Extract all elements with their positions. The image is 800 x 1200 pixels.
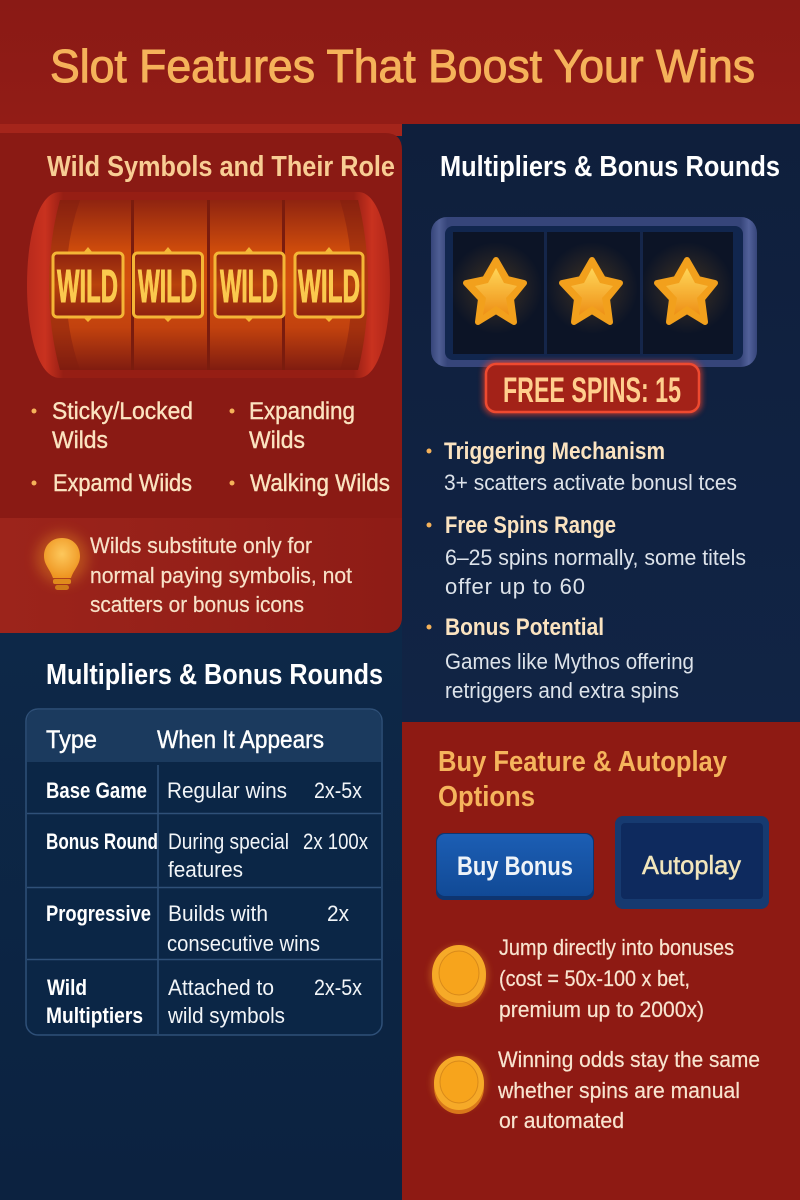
- button: buy bonus: Buy Bonus: [457, 851, 573, 881]
- panel: bottom-left navy background: [0, 620, 402, 1200]
- item: free spins range: [426, 512, 746, 599]
- row: progressive: 2x: [327, 901, 349, 926]
- icon: wild frame 4: [295, 247, 363, 322]
- item: bonus potential: [426, 614, 694, 703]
- text: buy feature note: (cost = 50x-100 x bet,: [499, 966, 690, 991]
- text: buy feature note: [499, 935, 734, 1022]
- row: wild multipliers: 2x-5x: [314, 975, 362, 1000]
- badge: free spins: [483, 361, 702, 415]
- text: wild tip: [90, 533, 353, 617]
- text: autoplay note: whether spins are manual: [497, 1078, 740, 1103]
- heading: buy feature and autoplay: Options: [438, 781, 535, 813]
- text: wild tip: scatters or bonus icons: [90, 592, 304, 617]
- list: wild types: Expanding: [249, 398, 355, 425]
- item: free spins range: 6–25 spins normally, some titels: [445, 545, 746, 570]
- button: autoplay: [615, 816, 769, 909]
- row: bonus round: features: [168, 857, 243, 882]
- icon: wild frame 1: [53, 247, 123, 322]
- row: wild multipliers: [46, 975, 362, 1028]
- icon: wild frame 3: [215, 247, 284, 322]
- heading: multipliers table: Multipliers & Bonus Rounds: [46, 659, 383, 691]
- background: title banner: [0, 0, 800, 125]
- panel: wild tip background: [0, 518, 402, 633]
- item: free spins range: Free Spins Range: [445, 512, 616, 539]
- item: triggering mechanism: 3+ scatters activate bonusl tces: [444, 470, 737, 495]
- row: progressive: Builds with: [168, 901, 268, 926]
- item: bonus potential: Bonus Potential: [445, 614, 604, 641]
- icon: coin 1: [429, 945, 489, 1007]
- table header: [27, 710, 381, 762]
- item: triggering mechanism: [426, 438, 737, 495]
- illustration: star slot machine: [431, 217, 757, 367]
- title: Slot Features That Boost Your Wins: [50, 40, 755, 92]
- row: bonus round: Bonus Round: [46, 829, 158, 854]
- icon: wild frame 3: WILD: [220, 260, 278, 312]
- icon: wild frame 2: WILD: [138, 260, 197, 312]
- row: bonus round: [46, 829, 368, 882]
- text: autoplay note: [497, 1047, 760, 1133]
- item: free spins range: offer up to 60: [445, 574, 585, 599]
- row: wild multipliers: wild symbols: [167, 1003, 285, 1028]
- text: autoplay note: Winning odds stay the same: [498, 1047, 760, 1072]
- list: wild types: Wilds: [249, 427, 305, 454]
- illustration: wild reels: [27, 192, 390, 378]
- row: base game: Regular wins: [167, 778, 287, 803]
- table: multiplier types: [26, 709, 382, 1035]
- text: autoplay note: or automated: [499, 1108, 624, 1133]
- row: base game: 2x-5x: [314, 778, 362, 803]
- list: wild types: Sticky/Locked: [52, 398, 193, 425]
- text: wild tip: Wilds substitute only for: [90, 533, 312, 558]
- button: autoplay: Autoplay: [642, 850, 741, 880]
- list: wild types: [32, 398, 390, 497]
- icon: coin 2: [431, 1055, 487, 1114]
- row: bonus round: During special: [168, 829, 289, 854]
- heading: wild symbols: Wild Symbols and Their Role: [47, 151, 395, 183]
- row: base game: [46, 778, 362, 803]
- text: wild tip: normal paying symbolis, not: [90, 563, 353, 588]
- text: buy feature note: premium up to 2000x): [499, 997, 704, 1022]
- icon: star 1: [450, 242, 542, 334]
- panel: top-right navy background: [402, 124, 800, 722]
- panel: wild symbols: [0, 124, 402, 633]
- row: wild multipliers: Attached to: [168, 975, 274, 1000]
- list: wild types: Expamd Wiids: [53, 470, 192, 497]
- icon: star 3: [641, 242, 733, 334]
- row: progressive: consecutive wins: [167, 931, 320, 956]
- row: progressive: [46, 901, 349, 956]
- table header: Type: [46, 726, 97, 754]
- badge: free spins: FREE SPINS: 15: [503, 371, 681, 410]
- item: triggering mechanism: Triggering Mechanism: [444, 438, 665, 465]
- text: buy feature note: Jump directly into bonuses: [499, 935, 734, 960]
- item: bonus potential: Games like Mythos offering: [445, 649, 694, 674]
- icon: star 2: [546, 242, 638, 334]
- row: bonus round: 2x 100x: [303, 829, 368, 854]
- row: base game: Base Game: [46, 778, 147, 803]
- row: wild multipliers: Multiptiers: [46, 1003, 143, 1028]
- row: wild multipliers: Wild: [47, 975, 87, 1000]
- panel: bottom-right red background: [402, 722, 800, 1200]
- list: wild types: Walking Wilds: [250, 470, 390, 497]
- list: bonus details: [426, 438, 746, 703]
- icon: wild frame 1: WILD: [57, 260, 118, 312]
- button: buy bonus: [436, 833, 594, 900]
- icon: wild frame 4: WILD: [298, 260, 360, 312]
- icon: wild frame 2: [134, 247, 202, 322]
- table header: When It Appears: [157, 726, 324, 754]
- heading: buy feature and autoplay: [438, 746, 727, 813]
- row: progressive: Progressive: [46, 901, 151, 926]
- icon: lightbulb: [36, 532, 88, 590]
- item: bonus potential: retriggers and extra spins: [445, 678, 679, 703]
- heading: buy feature and autoplay: Buy Feature & Autoplay: [438, 746, 727, 778]
- list: wild types: Wilds: [52, 427, 108, 454]
